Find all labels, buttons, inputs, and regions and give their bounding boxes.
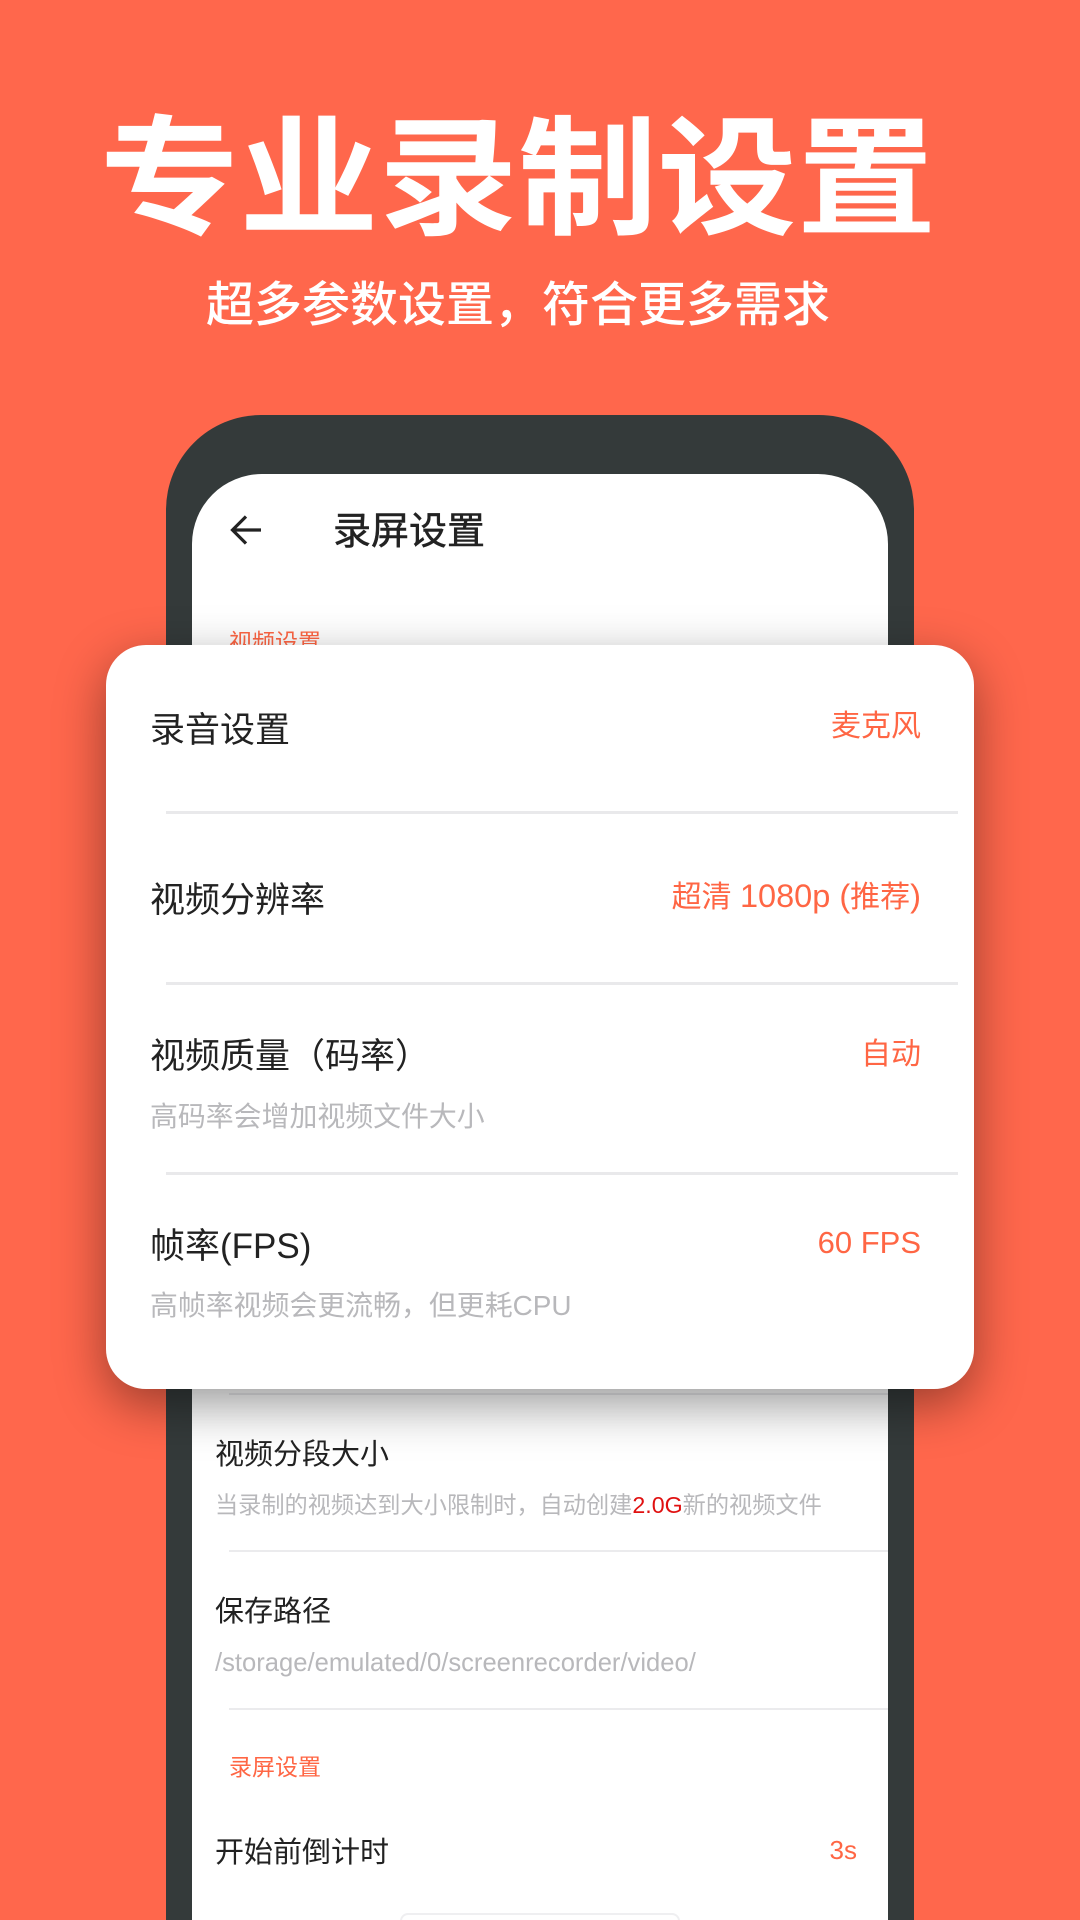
section heading: recording settings: 录屏设置 <box>229 1754 321 1780</box>
description: frame rate: 高帧率视频会更流畅，但更耗CPU <box>150 1290 571 1321</box>
row: frame rate <box>150 1225 921 1321</box>
row: video resolution <box>150 878 921 920</box>
description: video quality: 高码率会增加视频文件大小 <box>150 1101 485 1132</box>
value: resolution: 超清 1080p (推荐) <box>672 878 921 914</box>
setting: save path: 保存路径 <box>215 1596 331 1628</box>
value: fps: 60 FPS <box>818 1225 921 1260</box>
row: audio settings <box>150 710 921 750</box>
label: video resolution: 视频分辨率 <box>150 881 325 920</box>
floating pill outline <box>400 1913 680 1920</box>
label: video quality: 视频质量（码率） <box>150 1037 430 1076</box>
section heading: video settings: 视频设置 <box>229 629 321 655</box>
subtitle: 超多参数设置，符合更多需求 <box>206 279 830 332</box>
row: video quality <box>150 1037 921 1132</box>
panel: settings card <box>106 645 974 1389</box>
icon: back arrow <box>230 515 261 545</box>
setting description: segment size: 当录制的视频达到大小限制时，自动创建2.0G新的视频文件 <box>215 1492 822 1518</box>
label: audio settings: 录音设置 <box>150 711 290 750</box>
title: 专业录制设置 <box>100 108 936 252</box>
value: auto: 自动 <box>861 1038 921 1071</box>
setting: countdown: 开始前倒计时 <box>215 1837 389 1869</box>
label: frame rate: 帧率(FPS) <box>150 1227 311 1266</box>
value: microphone: 麦克风 <box>831 710 921 743</box>
screen title: 录屏设置 <box>333 511 485 553</box>
panel: phone frame <box>166 415 914 1920</box>
setting: segment size: 视频分段大小 <box>215 1439 389 1471</box>
panel: phone screen <box>192 474 888 1920</box>
setting description: save path: /storage/emulated/0/screenrecorder/video/ <box>215 1649 696 1677</box>
setting value: countdown: 3s <box>830 1835 857 1865</box>
